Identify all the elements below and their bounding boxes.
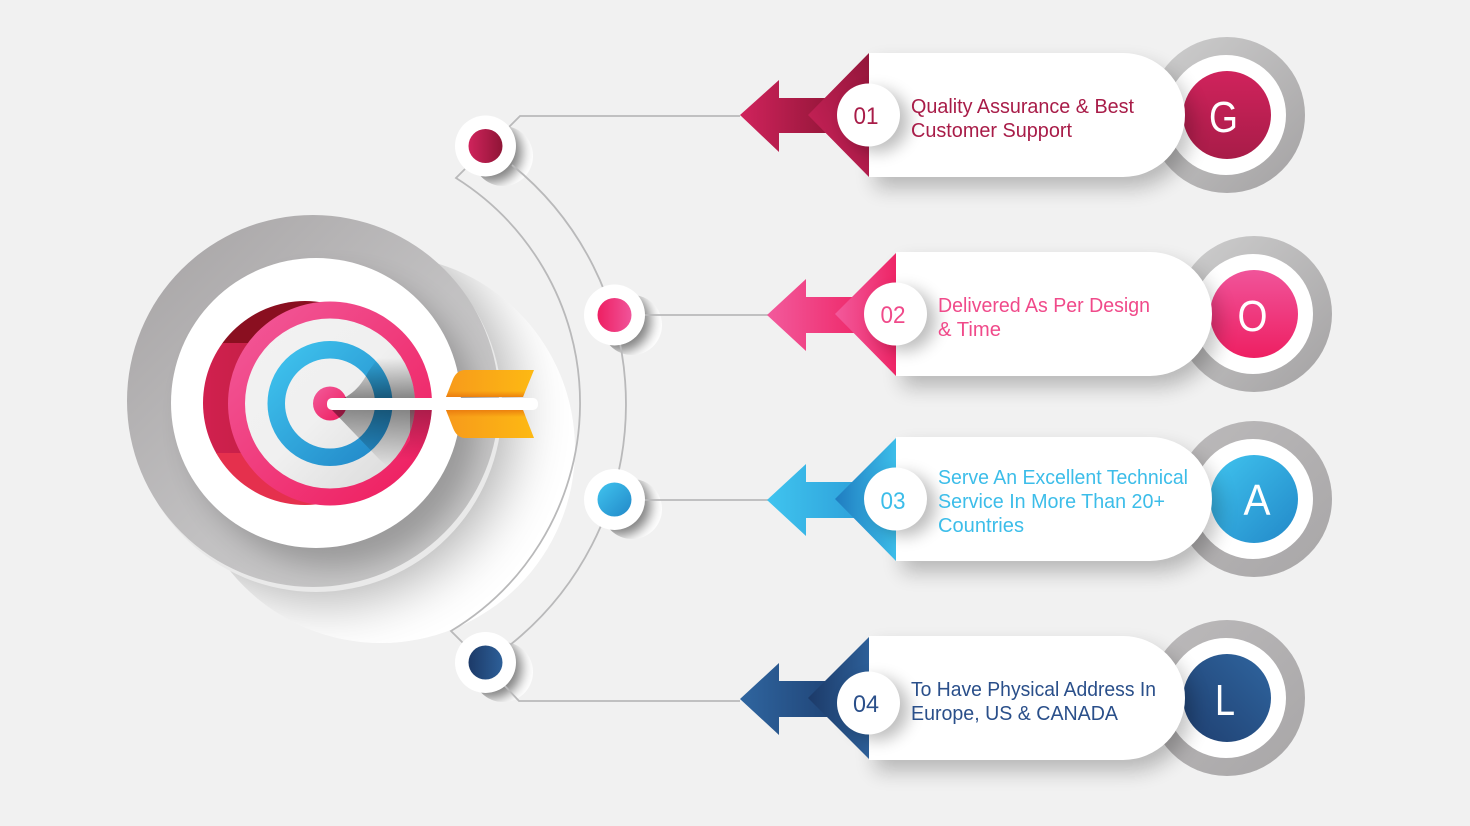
letter badge (1176, 236, 1332, 392)
number badge: 02 (880, 302, 906, 329)
letter badge (1176, 421, 1332, 577)
pale rim (130, 220, 502, 592)
letter badge: G (1209, 93, 1238, 142)
node 4 (455, 632, 516, 693)
card 01 (740, 37, 1305, 193)
arrow head (808, 637, 869, 759)
letter badge (1149, 620, 1305, 776)
pill (896, 252, 1212, 376)
text: & Time (938, 318, 1001, 341)
target graphic (127, 215, 575, 643)
white plate (171, 258, 461, 548)
pill (869, 53, 1185, 177)
grey outer ring (127, 215, 499, 587)
direction arrow (740, 80, 840, 152)
top fletching (446, 370, 534, 397)
letter badge: L (1215, 676, 1235, 725)
pill shadow (875, 647, 1192, 771)
pill (896, 437, 1212, 561)
fletching lower shade (446, 410, 526, 417)
pink ring shadow segment (401, 410, 432, 454)
number badge (864, 468, 936, 536)
text: Service In More Than 20+ (938, 490, 1165, 513)
node 2 (584, 284, 645, 346)
number badge (837, 84, 909, 152)
text (938, 466, 1188, 537)
text: Serve An Excellent Technical (938, 466, 1188, 489)
text: Delivered As Per Design (938, 294, 1150, 317)
number badge: 04 (853, 691, 879, 718)
letter badge: A (1244, 476, 1271, 525)
direction arrow (767, 279, 867, 351)
direction arrow (767, 464, 867, 536)
card 04 (740, 620, 1305, 776)
blue ring (276, 350, 384, 457)
arrow head (808, 53, 869, 177)
bottom fletching (446, 410, 534, 438)
crescent back of target (203, 301, 320, 505)
text (938, 294, 1150, 341)
fletching inner shade (446, 391, 526, 397)
card 02 (767, 236, 1332, 392)
white backing disc (187, 255, 575, 643)
letter badge: O (1238, 292, 1268, 341)
soft shadow on disc (230, 264, 546, 632)
pill shadow (902, 263, 1219, 387)
cast shadow of arrow (332, 362, 415, 461)
pill shadow (875, 64, 1192, 188)
node backs with shadows (480, 127, 662, 702)
number badge: 03 (880, 488, 906, 515)
arrow head (835, 438, 896, 561)
arrow head (835, 253, 896, 376)
number badge (864, 282, 936, 351)
direction arrow (740, 663, 840, 735)
text: Europe, US & CANADA (911, 702, 1118, 725)
inner plate (245, 318, 415, 488)
arrow (327, 370, 538, 438)
text (911, 678, 1156, 725)
text: Countries (938, 514, 1024, 537)
pill shadow (902, 448, 1219, 572)
letter badge (1149, 37, 1305, 193)
number badge: 01 (854, 103, 878, 130)
bullseye (313, 386, 347, 420)
card 03 (767, 421, 1332, 577)
text: Customer Support (911, 119, 1072, 142)
connector lines (451, 116, 770, 701)
text (911, 95, 1134, 142)
node 1 (455, 116, 516, 176)
text: Quality Assurance & Best (911, 95, 1134, 118)
text: To Have Physical Address In (911, 678, 1156, 701)
pill (869, 636, 1185, 760)
number badge (837, 672, 909, 740)
node 3 (584, 469, 645, 530)
pink ring (228, 302, 432, 506)
ring shadow (189, 277, 479, 567)
arrow shaft (327, 398, 538, 410)
